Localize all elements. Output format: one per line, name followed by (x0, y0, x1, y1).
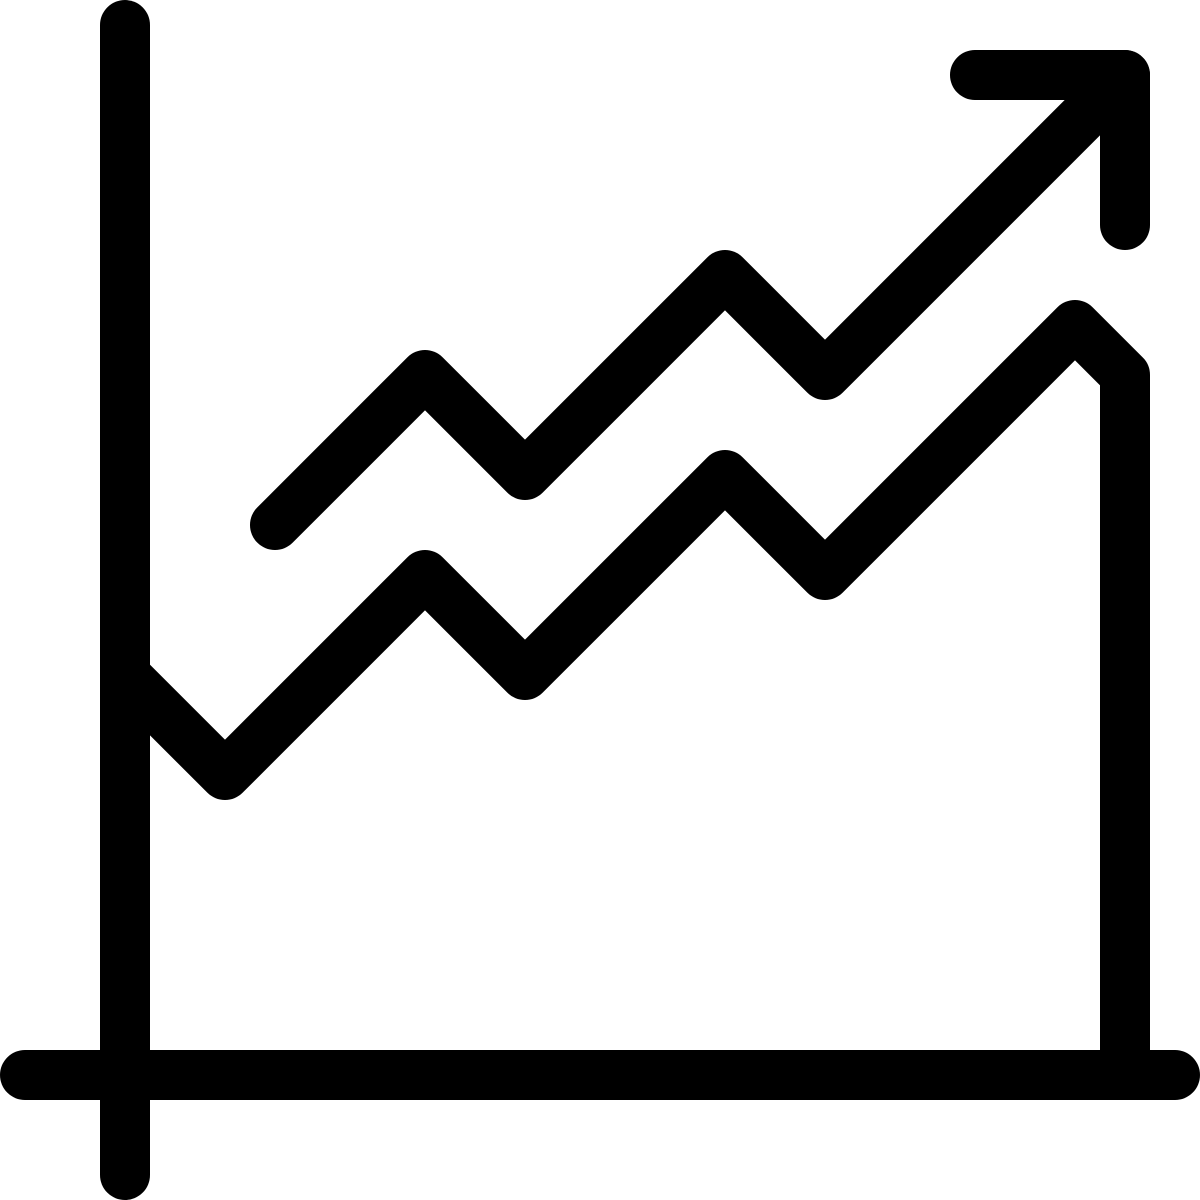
arrow head (975, 75, 1125, 225)
vertical axis (100, 25, 150, 1175)
trend arrow line (275, 75, 1125, 525)
horizontal axis (25, 1050, 1175, 1100)
area line (125, 325, 1125, 1075)
